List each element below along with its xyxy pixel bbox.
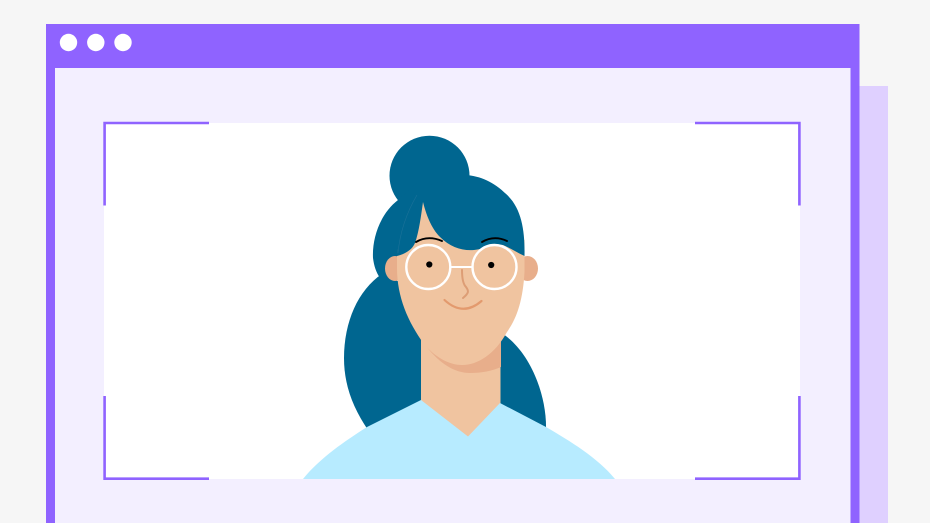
shirt — [303, 400, 615, 479]
eyebrow: left — [416, 238, 442, 242]
frame corner brackets — [105, 123, 799, 479]
ear: left — [385, 256, 405, 281]
window shadow panel — [859, 86, 888, 523]
hair strand line — [398, 195, 417, 253]
window content area — [55, 68, 850, 523]
neck shadow — [426, 332, 501, 373]
bracket: top left — [105, 123, 209, 206]
person portrait — [303, 136, 615, 479]
glasses — [406, 245, 516, 289]
nose — [462, 270, 468, 298]
hair fringe — [397, 179, 525, 256]
hair bun — [390, 136, 470, 216]
window control dots — [60, 34, 132, 51]
bracket: top right — [695, 123, 799, 206]
face — [397, 195, 524, 365]
eye: left — [426, 261, 432, 268]
eye: right — [488, 262, 494, 268]
eyebrow: right — [482, 238, 507, 242]
bracket: bottom left — [105, 396, 209, 479]
mouth — [444, 300, 482, 309]
ear: right — [517, 256, 538, 281]
bracket: bottom right — [695, 396, 799, 479]
upper hair mass — [373, 175, 524, 280]
neck — [421, 325, 500, 437]
back hair: long ponytail — [344, 274, 546, 430]
video frame background — [104, 123, 800, 479]
